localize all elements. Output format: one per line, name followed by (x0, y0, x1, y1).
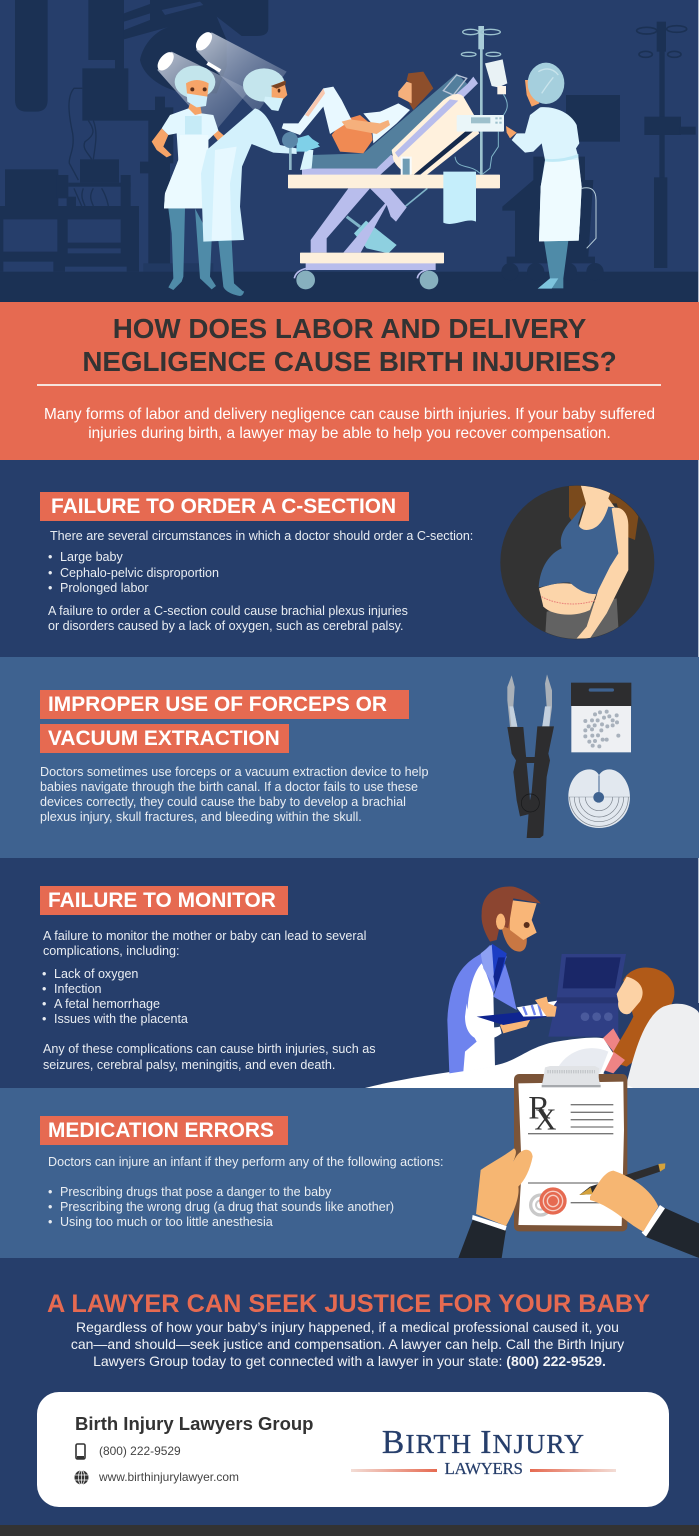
hero illustration: delivery room (0, 0, 698, 302)
list: medication actions: Prescribing the wrong drug (a drug that sounds like another) (60, 1200, 394, 1214)
text: forceps explanation: babies navigate through the birth canal. If a doctor fails to use these (40, 780, 418, 794)
clipboard (514, 1074, 627, 1231)
list: medication actions: • (48, 1215, 52, 1229)
icon: pregnant belly with scar (500, 485, 654, 640)
nurse leaning (201, 68, 320, 296)
bottom strip (0, 1525, 699, 1536)
stamps (531, 1195, 551, 1215)
title (82, 313, 617, 377)
logo (351, 1424, 616, 1478)
text: C-section consequences (48, 604, 408, 633)
illustration: prescription clipboard and hands (458, 1066, 699, 1258)
heading: call to action: A LAWYER CAN SEEK JUSTICE FOR YOUR BABY (47, 1290, 650, 1318)
title: NEGLIGENCE CAUSE BIRTH INJURIES? (82, 346, 617, 377)
text: C-section consequences: A failure to order a C-section could cause brachial plexus injuries (48, 604, 408, 618)
panel: forceps or vacuum (0, 657, 699, 858)
list: C-section reasons: • (48, 581, 52, 595)
background silhouettes left (0, 0, 699, 302)
text: forceps explanation: plexus injury, skull fractures, and bleeding within the skull. (40, 810, 362, 824)
phone number: (800) 222-9529 (99, 1444, 181, 1458)
text: medication intro: Doctors can injure an infant if they perform any of the following actions: (48, 1155, 444, 1169)
panel: call to action (0, 1258, 699, 1525)
monitor (548, 954, 626, 1037)
intro divider (37, 384, 661, 386)
bed frame (288, 172, 500, 289)
list: C-section reasons: • (48, 550, 52, 564)
right hand and sleeve (645, 1207, 699, 1258)
list: monitoring complications: Issues with the placenta (54, 1012, 188, 1026)
illustration: prescription clipboard and hands: X (534, 1102, 556, 1136)
text: C-section circumstances: There are several circumstances in which a doctor should order a C-section: (50, 529, 473, 543)
website: www.birthinjurylawyer.com (99, 1470, 239, 1484)
text: forceps explanation (40, 764, 428, 824)
logo subtitle: LAWYERS (444, 1459, 522, 1478)
firm name: Birth Injury Lawyers Group (75, 1413, 314, 1434)
nurse left (152, 66, 226, 290)
logo left rule (351, 1469, 437, 1472)
text: call to action body (71, 1319, 624, 1369)
list: monitoring complications: • (42, 997, 46, 1011)
intro text (44, 406, 655, 442)
list: C-section reasons: Cephalo-pelvic disproportion (60, 566, 219, 580)
background silhouettes right (501, 22, 696, 280)
text: monitoring consequences: seizures, cerebral palsy, meningitis, and even death. (43, 1058, 335, 1072)
list: C-section reasons: Large baby (60, 550, 123, 564)
list: medication actions (48, 1184, 394, 1229)
text: forceps explanation: Doctors sometimes use forceps or a vacuum extraction device to help (40, 764, 428, 778)
icon: phone (75, 1443, 86, 1460)
title: HOW DOES LABOR AND DELIVERY (113, 313, 586, 344)
heading: medication errors: MEDICATION ERRORS (48, 1119, 274, 1142)
Rx symbol: R (528, 1090, 550, 1126)
logo wordmark: BIRTH INJURY (382, 1424, 585, 1461)
text: monitoring intro (43, 928, 366, 958)
list: monitoring complications: • (42, 966, 46, 980)
panel: failure to monitor (0, 858, 699, 1088)
lamps and beams (154, 29, 287, 133)
list: C-section reasons: • (48, 566, 52, 580)
pen (579, 1164, 665, 1195)
left hand and sleeve (458, 1220, 506, 1258)
contact card (37, 1392, 669, 1507)
list: monitoring complications: Infection (54, 982, 101, 996)
forceps (507, 675, 517, 727)
doctor (447, 945, 507, 1073)
heading: improper use of forceps or vacuum: IMPROPER USE OF FORCEPS OR (48, 693, 387, 716)
list: C-section reasons (48, 550, 219, 595)
text: C-section consequences: or disorders caused by a lack of oxygen, such as cerebral palsy. (48, 619, 403, 633)
patient (332, 115, 373, 153)
intro text: Many forms of labor and delivery negligence can cause birth injuries. If your baby suffered (44, 406, 655, 423)
list: medication actions: • (48, 1200, 52, 1214)
text: forceps explanation: devices correctly, they could cause the baby to develop a brachial (40, 795, 406, 809)
list: medication actions: Using too much or too little anesthesia (60, 1215, 273, 1229)
heading: vacuum extraction: VACUUM EXTRACTION (48, 727, 280, 750)
text: call to action body: Regardless of how your baby’s injury happened, if a medical professional caused it, you (76, 1319, 619, 1335)
text: monitoring consequences: Any of these complications can cause birth injuries, such as (43, 1042, 376, 1056)
bedding and pillow (623, 1004, 699, 1088)
panel: medication errors (0, 1088, 699, 1258)
list: monitoring complications: • (42, 982, 46, 996)
panel: failure to order a C-section (0, 460, 699, 657)
IV stand and nurse right (455, 26, 596, 289)
panel: intro (0, 302, 699, 460)
text: monitoring intro: complications, including: (43, 944, 180, 958)
list: monitoring complications: A fetal hemorrhage (54, 997, 160, 1011)
text: monitoring intro: A failure to monitor the mother or baby can lead to several (43, 928, 366, 942)
heading: failure to monitor: FAILURE TO MONITOR (48, 889, 276, 912)
list: C-section reasons: Prolonged labor (60, 581, 149, 595)
stirrup and bed back with patient (282, 72, 479, 181)
icon: forceps and vacuum devices (507, 674, 632, 838)
list: monitoring complications: Lack of oxygen (54, 966, 138, 980)
list: monitoring complications: • (42, 1012, 46, 1026)
illustration: doctor with patient in bed (365, 886, 699, 1088)
text: call to action body: can—and should—seek justice and compensation. A lawyer can help. Call the Birth Injury (71, 1336, 624, 1352)
list: medication actions: • (48, 1184, 52, 1198)
logo right rule (530, 1469, 616, 1472)
text: call to action body: Lawyers Group today to get connected with a lawyer in your state: (800) 222-9529. (93, 1353, 606, 1369)
icon: globe (74, 1470, 88, 1484)
text: monitoring consequences (43, 1042, 376, 1072)
intro text: injuries during birth, a lawyer may be able to help you recover compensation. (88, 425, 611, 442)
list: monitoring complications (42, 966, 188, 1026)
package of beads (571, 683, 631, 706)
list: medication actions: Prescribing drugs that pose a danger to the baby (60, 1184, 331, 1198)
vacuum cup (568, 769, 630, 828)
heading: failure to order a C-section: FAILURE TO ORDER A C-SECTION (51, 495, 396, 518)
patient (607, 968, 674, 1067)
